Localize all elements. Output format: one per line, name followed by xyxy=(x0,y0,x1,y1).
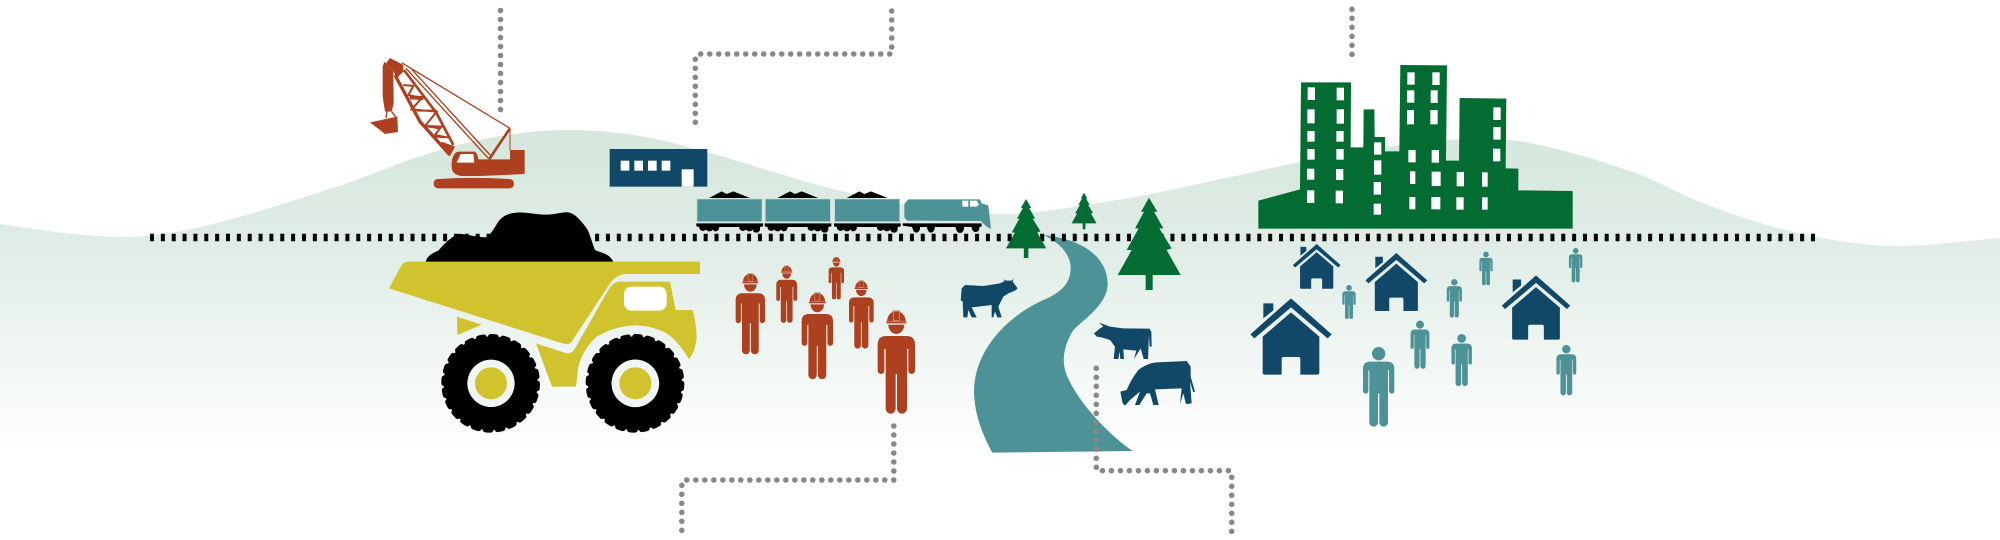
truck small plate xyxy=(457,317,482,335)
cattle xyxy=(961,279,1195,406)
coal wagon 1 xyxy=(696,191,763,233)
resident 4 xyxy=(1447,279,1462,318)
coal wagon 2 xyxy=(765,191,831,233)
tree 2 xyxy=(1072,193,1097,229)
houses xyxy=(1250,244,1570,375)
resident 1 xyxy=(1363,347,1394,427)
resident 7 xyxy=(1556,345,1576,395)
crane tracks xyxy=(434,178,514,188)
truck cab xyxy=(536,282,697,387)
railway track xyxy=(150,234,1815,241)
crane body xyxy=(452,150,525,176)
cow 2 xyxy=(1094,323,1152,359)
river xyxy=(974,235,1133,453)
coal wagon 3 xyxy=(834,191,901,233)
office building xyxy=(610,149,707,187)
resident 6 xyxy=(1479,252,1493,285)
worker 6 xyxy=(878,311,915,414)
resident 5 xyxy=(1451,334,1472,386)
crane bucket links xyxy=(386,112,396,118)
worker 1 xyxy=(736,273,765,354)
coal load xyxy=(426,212,613,262)
rear wheel xyxy=(444,336,538,430)
house 4 xyxy=(1502,275,1570,340)
crane xyxy=(370,58,525,188)
house 3 xyxy=(1365,253,1427,311)
background hills xyxy=(0,130,2000,452)
crane lattice boom xyxy=(395,63,510,159)
mining dump truck xyxy=(389,212,700,430)
front wheel xyxy=(588,336,682,430)
workers xyxy=(736,257,915,414)
truck window xyxy=(624,287,667,311)
crane boom head xyxy=(386,58,403,78)
cow 1 xyxy=(961,279,1018,317)
tree 3 xyxy=(1118,198,1181,290)
house 1 xyxy=(1250,298,1332,375)
dotted connectors xyxy=(500,9,1352,532)
resident 3 xyxy=(1411,321,1429,369)
house 2 xyxy=(1293,244,1341,289)
crane boom foot xyxy=(440,142,455,156)
crane dipper arm xyxy=(383,62,394,112)
crane cab window xyxy=(457,154,474,163)
cow 3 xyxy=(1120,361,1195,406)
resident 2 xyxy=(1342,285,1356,319)
worker 3 xyxy=(802,293,833,379)
worker 2 xyxy=(776,266,797,323)
city windows xyxy=(1307,72,1501,215)
truck dump bed xyxy=(389,262,700,344)
locomotive xyxy=(903,199,991,233)
worker 5 xyxy=(849,281,874,349)
crane bucket xyxy=(370,117,398,134)
tree 1 xyxy=(1006,199,1046,258)
city skyline xyxy=(1258,65,1573,229)
worker 4 xyxy=(829,257,844,299)
trees xyxy=(1006,193,1181,290)
residents xyxy=(1342,248,1582,427)
coal train xyxy=(696,191,991,233)
resident 8 xyxy=(1569,248,1582,282)
